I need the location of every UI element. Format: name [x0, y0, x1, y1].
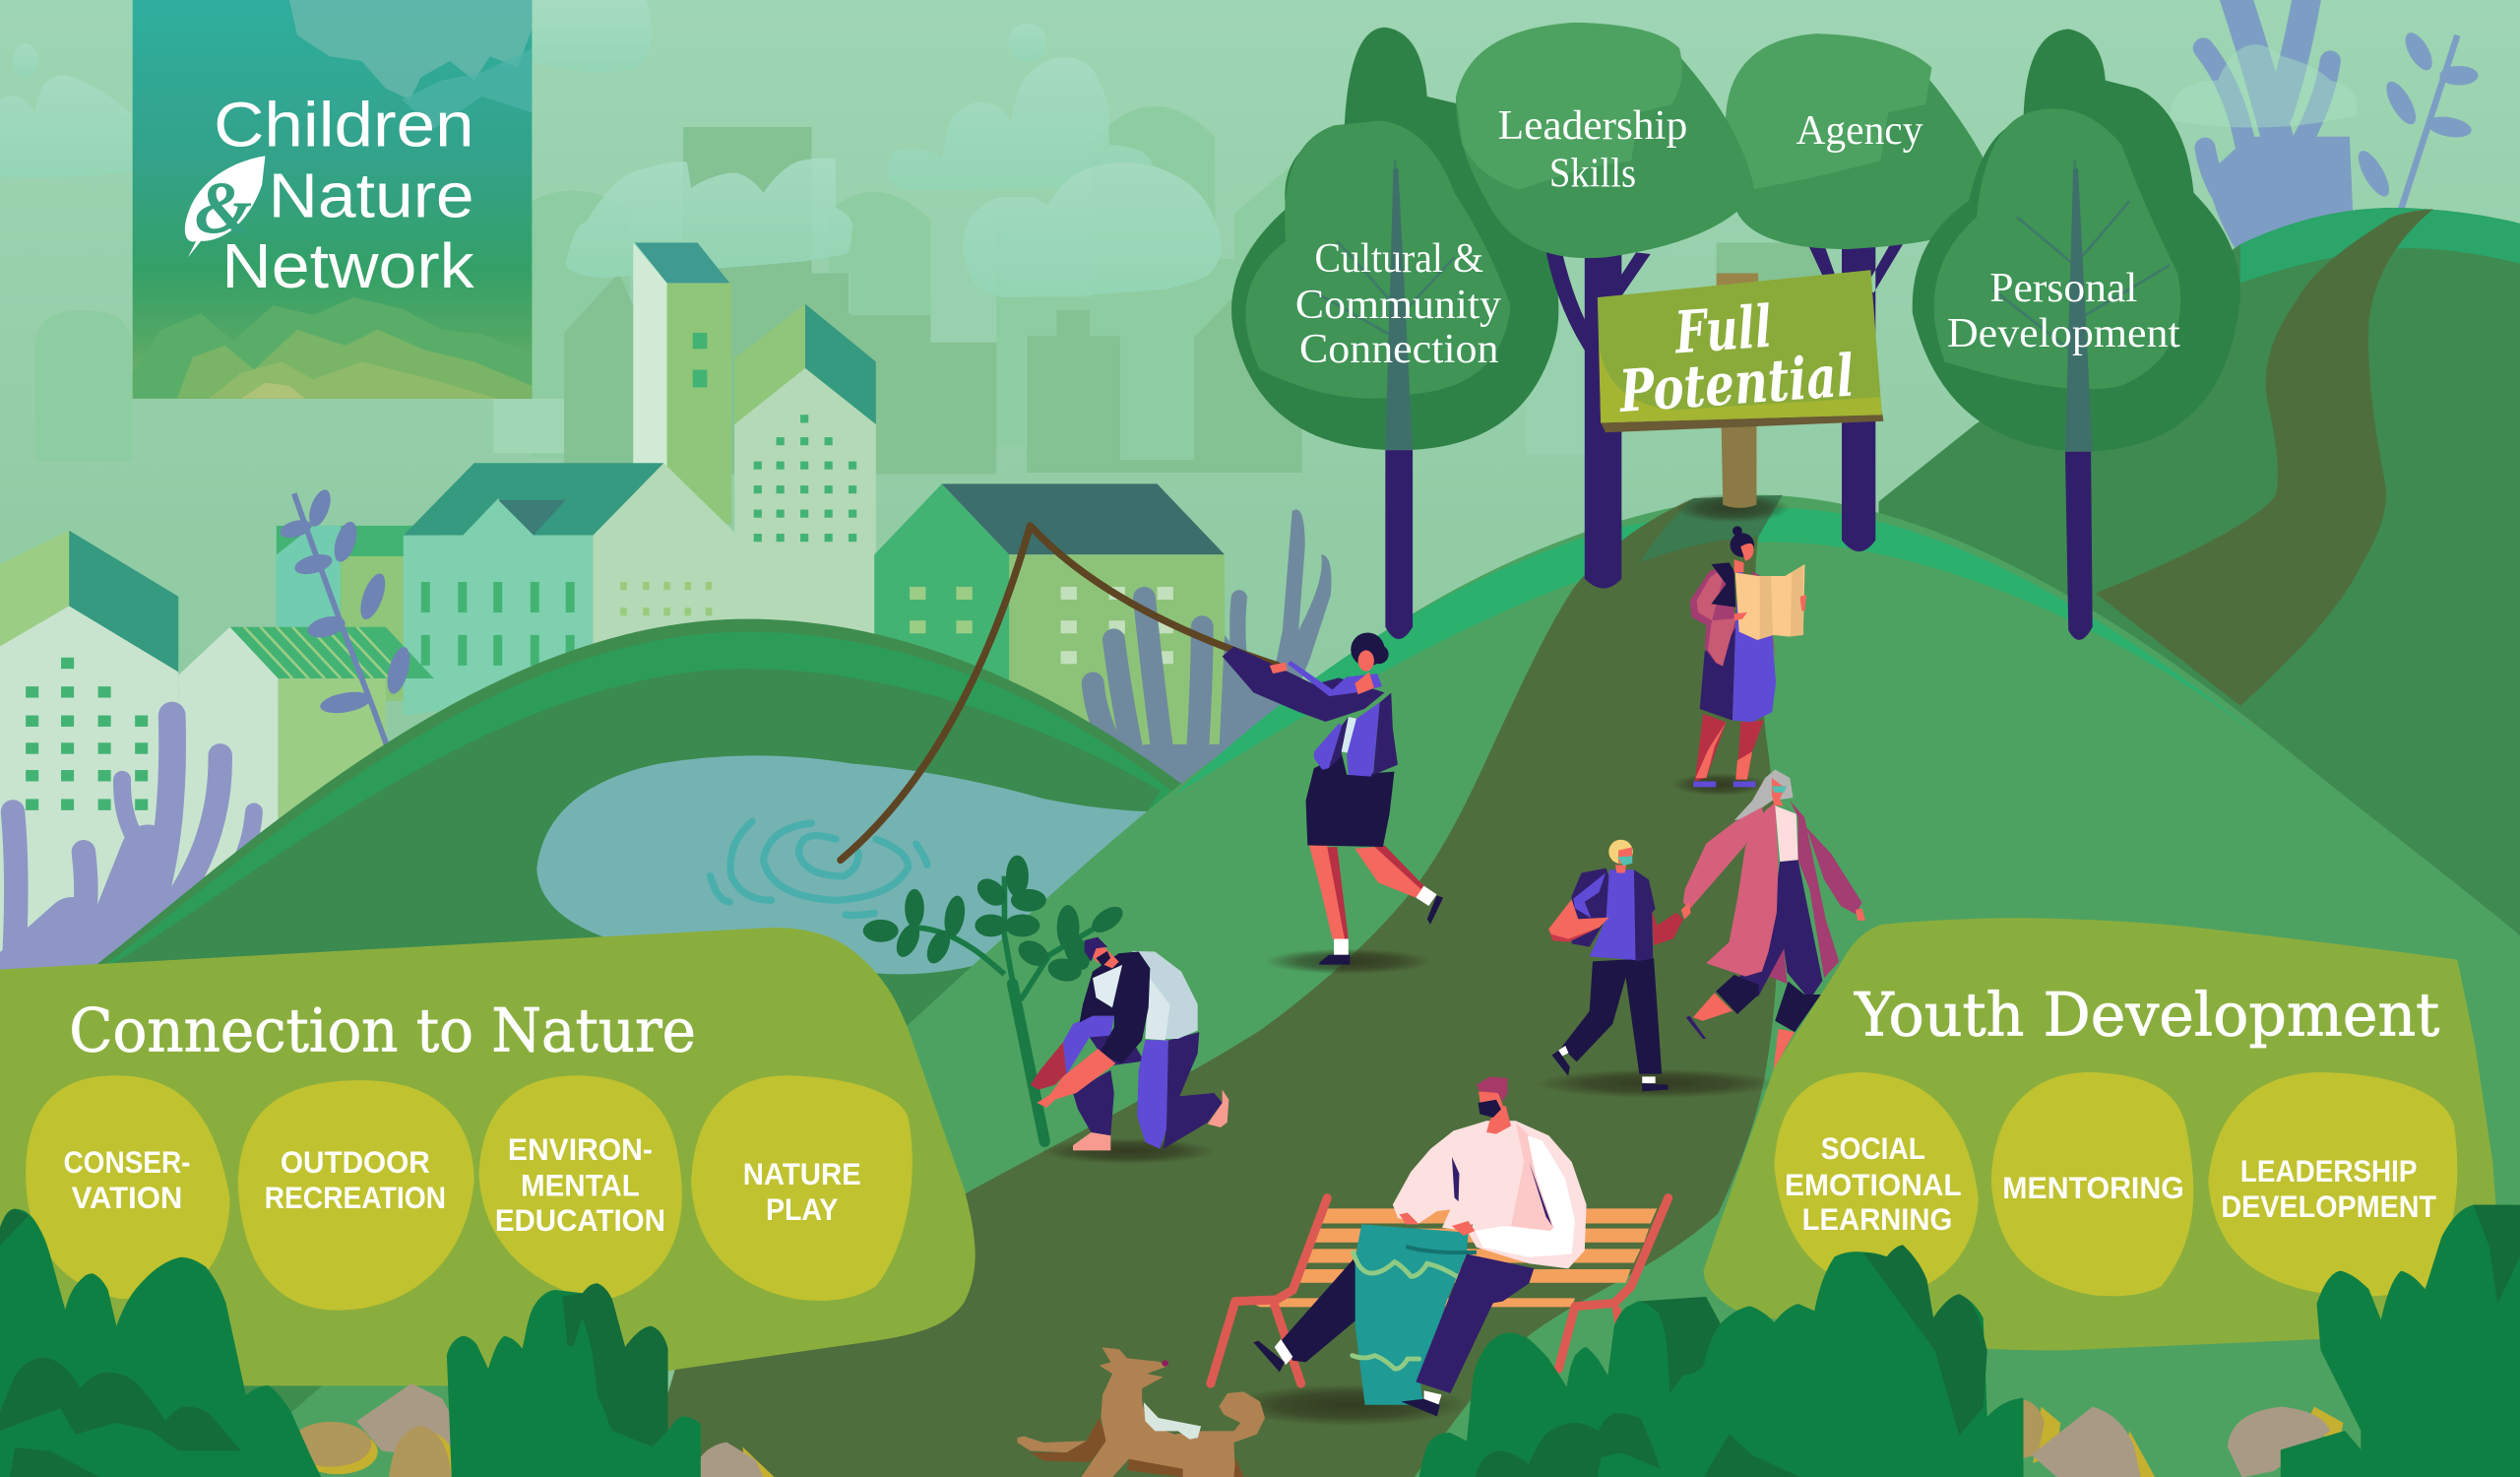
dark roof house — [874, 483, 1225, 796]
sign post — [1674, 274, 1791, 523]
bush: bottom centre-right — [1419, 1245, 2024, 1477]
left hill — [96, 619, 1197, 1045]
legs — [1282, 1257, 1356, 1362]
clouds — [0, 0, 1222, 297]
tower — [633, 243, 731, 524]
bush: bottom centre-left — [447, 1283, 701, 1477]
main trail — [643, 495, 1783, 1477]
cream house — [593, 463, 734, 675]
pill: mentoring — [1991, 1072, 2193, 1296]
pill: conservation — [26, 1075, 229, 1299]
top-right plants — [2170, 0, 2479, 257]
pill: nature play: PLAY — [766, 1192, 839, 1227]
striped roof house — [178, 627, 434, 900]
pill: environmental education: MENTAL — [521, 1169, 640, 1203]
pill: nature play: NATURE — [743, 1157, 861, 1191]
logo panel — [132, 0, 532, 399]
town buildings — [0, 243, 1225, 996]
trunk — [1385, 450, 1413, 639]
person: child with backpack — [1535, 840, 1779, 1098]
fishing rod — [841, 526, 1278, 860]
pill: outdoor recreation: OUTDOOR — [281, 1145, 430, 1180]
pill: mentoring: MENTORING — [2002, 1171, 2184, 1205]
faded city skyline — [35, 106, 1822, 475]
tree labels: Cultural & — [1315, 235, 1483, 282]
ground below left panel — [241, 1380, 482, 1477]
logo text: Children — [214, 91, 474, 161]
right back hill — [1879, 208, 2520, 1029]
water ripples — [711, 821, 927, 916]
tree labels: Leadership — [1498, 102, 1687, 149]
person: planting man with sapling — [863, 856, 1228, 1164]
heading: Youth Development — [1854, 981, 2439, 1050]
tree labels: Development — [1947, 310, 2180, 356]
panel: connection to nature — [0, 928, 976, 1385]
logo text: Network — [221, 231, 474, 301]
pill: leadership development: DEVELOPMENT — [2221, 1189, 2436, 1224]
tree: agency — [1726, 33, 1999, 551]
pill: environmental education: EDUCATION — [495, 1203, 665, 1238]
pill: outdoor recreation: RECREATION — [265, 1181, 446, 1215]
bush: bottom left — [0, 1209, 322, 1477]
sapling — [863, 856, 1215, 1164]
rocks — [291, 1383, 2343, 1477]
heading: Connection to Nature — [69, 997, 696, 1066]
left corner house — [0, 531, 178, 996]
winding path — [2096, 209, 2433, 706]
dog — [1017, 1347, 1265, 1477]
pill: social emotional learning: EMOTIONAL — [1785, 1168, 1962, 1202]
tall gabled house — [734, 304, 876, 675]
person: man on bench with bin — [1211, 1076, 1669, 1426]
pill: nature play — [691, 1075, 913, 1301]
bench — [1211, 1198, 1669, 1383]
sign text: Potential — [1615, 342, 1857, 425]
tree labels: Agency — [1796, 107, 1923, 154]
person: woman reading map — [1671, 526, 1806, 796]
logo leaf ampersand icon: & — [195, 168, 252, 250]
map — [1735, 564, 1804, 640]
blue-grey coral plant — [1093, 509, 1331, 772]
pill: leadership development: LEADERSHIP — [2240, 1154, 2418, 1188]
pill: conservation: VATION — [72, 1181, 182, 1215]
sign text — [1611, 287, 1857, 425]
tree: leadership skills — [1456, 23, 1755, 589]
logo text: Nature — [269, 161, 474, 230]
tree labels: Connection — [1299, 326, 1498, 372]
person: woman with grey hair — [1681, 770, 1865, 1070]
tree labels: Personal — [1989, 265, 2137, 311]
pill: social emotional learning — [1774, 1072, 1979, 1293]
tree labels — [1295, 102, 2180, 372]
pill: conservation: CONSER- — [63, 1145, 190, 1180]
teal townhouse — [404, 463, 663, 716]
sign text: Full — [1671, 292, 1774, 367]
tree labels: Community — [1295, 282, 1502, 328]
blue plant left of town — [279, 486, 414, 755]
full potential sign — [1598, 270, 1883, 523]
tree: cultural and community connection — [1231, 28, 1558, 639]
logo text — [214, 91, 474, 301]
tree: personal development — [1913, 29, 2240, 640]
pill: leadership development — [2208, 1072, 2457, 1296]
lavender coral plant — [0, 716, 254, 989]
bin — [1353, 1224, 1477, 1405]
pond — [536, 755, 1166, 974]
person: woman fishing — [1223, 632, 1443, 974]
trunk — [2065, 452, 2093, 640]
torso — [1393, 1121, 1587, 1268]
tree labels: Skills — [1549, 150, 1636, 196]
pill: social emotional learning: LEARNING — [1802, 1202, 1952, 1237]
pill: environmental education — [479, 1075, 682, 1300]
pill: social emotional learning: SOCIAL — [1821, 1131, 1925, 1166]
small back house — [277, 526, 437, 707]
pill: outdoor recreation — [238, 1080, 474, 1311]
logo leaf ampersand icon — [185, 156, 265, 257]
bush: bottom right — [2281, 1205, 2520, 1477]
pill: environmental education: ENVIRON- — [508, 1132, 653, 1167]
panel: youth development — [1704, 918, 2500, 1350]
centre hill — [643, 495, 2520, 1477]
